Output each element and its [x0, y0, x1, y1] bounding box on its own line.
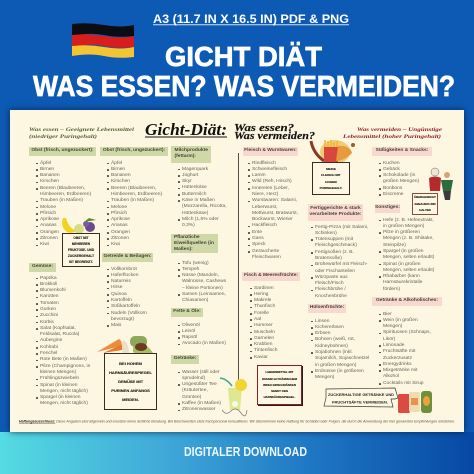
list: Süßigkeiten: Bonbons	[383, 186, 402, 191]
list: Getreide: Nudeln (Vollkorn	[111, 311, 147, 316]
header: Gemüse: Gemüse:	[32, 264, 53, 269]
list: Fette & Öle	[178, 322, 226, 346]
list: Getränke & Alkoholisches	[379, 312, 431, 386]
list: Pflanzliche Eiweißquellen: Tofu (wenig)	[182, 260, 209, 266]
heading: Was vermeiden unsuitable foods: Lebensmittel (hoher Puringehalt)	[342, 133, 441, 140]
icon: two people	[429, 168, 453, 200]
list: Hülsenfrüchte: Mengen)	[315, 375, 334, 380]
list: Getränke good: Grüntee)	[182, 395, 201, 400]
callout: vegetables: HARNSÄURESPIEGEL	[109, 370, 152, 375]
header: Fisch: Fisch & Meeresfrüchte:	[244, 273, 298, 278]
list: Getränke good: Wasser (still oder	[182, 370, 220, 374]
list: Sonstiges: Steinpilze)	[383, 243, 406, 248]
list: Milchprodukte: Milch (1,5% oder	[182, 217, 219, 222]
list: Milchprodukte: 0,3%)	[182, 223, 195, 228]
heading: Was essen? Was vermeiden?: Was essen?	[234, 123, 294, 134]
header: Fleisch: Fleisch & Wurstwaren:	[244, 148, 297, 153]
list: Fertiggerichte: Würzpaste aus	[315, 275, 348, 280]
list: Getränke good: (Kräutertee,	[182, 388, 208, 393]
list: Fleisch: Bockwurst, Wiener	[252, 217, 293, 222]
list: Sonstiges: Mengen (z. B. Shiitake,	[383, 236, 434, 241]
list: Getränke good: Zitronenwasser	[182, 407, 215, 412]
list: Getränke & Alkoholisches: Cocktails mit Sirup	[383, 381, 424, 386]
header: Getreide: Getreide & Beilagen:	[103, 254, 152, 259]
list: Milchprodukte: Skyr	[182, 179, 192, 184]
footer: digital download: DIGITALER DOWNLOAD	[184, 445, 307, 459]
list: Getränke & Alkoholisches: Energydrinks	[383, 362, 412, 367]
list: Gemüse: Blumenkohl	[40, 288, 66, 293]
callout: fruit	[62, 233, 100, 267]
list: Sonstiges: Spinat (in großen	[383, 262, 421, 267]
list: Hülsenfrüchte: Sojabohnen (inkl.	[315, 350, 353, 355]
callout: fruit: IST BEGRENZT.	[69, 260, 93, 264]
list: Obst 2: Bananen	[111, 173, 131, 178]
list: Getreide: Kartoffeln	[111, 298, 132, 303]
list: Fleisch: Rindfleisch	[252, 160, 276, 166]
list: Fleisch: Gans	[252, 236, 264, 241]
list: Süßigkeiten: Eiscreme	[383, 192, 403, 197]
list: Getränke & Alkoholisches: Mengen)	[383, 324, 402, 329]
list: Süßigkeiten: Gebäck	[383, 167, 400, 172]
list: Fertiggerichte: Schinken)	[315, 231, 337, 236]
list: Gemüse: Spinat (in kleinen	[40, 383, 78, 388]
list: Gemüse: Kohlrabi	[40, 345, 58, 350]
list: Fertiggerichte: Fleischbrühe /	[315, 287, 346, 292]
list: Gemüse: Feldsalat, Rucola)	[40, 332, 79, 337]
callout: glycemic index: LEBENSMITTEL MIT	[266, 370, 293, 374]
list: Getränke & Alkoholisches: Spirituosen (Schnaps,	[383, 330, 431, 335]
list: Fleisch: Speck	[252, 242, 266, 247]
list: Obst 1: Beeren (Blaubeeren,	[40, 186, 85, 191]
list: Getränke & Alkoholisches: Limonade	[383, 343, 404, 348]
list: Hülsenfrüchte: Erdnüsse (in größeren	[315, 369, 364, 374]
list: Obst 2: Ananas	[111, 223, 128, 228]
list: Sonstiges	[379, 218, 434, 292]
list: Getreide: Hirse	[111, 285, 122, 290]
list: Obst 1: Trauben (in Maßen)	[40, 198, 83, 203]
heading: Was vermeiden unsuitable foods: Was vermeiden – Ungünstige	[357, 127, 443, 133]
header: Getränke good: Getränke:	[174, 356, 196, 361]
header: Süßigkeiten: Süßigkeiten & Snacks:	[376, 148, 428, 153]
list: Fleisch: Leberwurst,	[252, 205, 278, 210]
callout: fruit: FRUKTOSE- UND	[68, 248, 94, 252]
list: Obst 2: Beeren (Blaubeeren,	[111, 186, 156, 191]
header: Gemüse	[29, 263, 56, 272]
list: Fisch: Hering	[254, 292, 268, 297]
list: Fertiggerichte: Tütensuppen (mit	[315, 237, 353, 242]
list: Obst 1: Birnen	[40, 167, 54, 172]
divider line	[238, 153, 239, 385]
list: Pflanzliche Eiweißquellen: Samen (Leinsamen,	[182, 292, 226, 297]
list: Fisch: Muscheln	[254, 330, 275, 335]
list: Gemüse: Brokkoli	[40, 282, 57, 287]
header: Getränke & Alkoholisches: Getränke & Alkoholisches:	[376, 298, 438, 303]
list: Gemüse: Aubergine	[40, 338, 62, 343]
list: Getreide: Naturreis	[111, 279, 131, 284]
list: Sonstiges: Hefe (z. B. Hefeextrakt,	[383, 218, 434, 222]
icon: lemon drink	[220, 377, 248, 416]
callout: meat	[312, 162, 350, 195]
list: Obst 2: Aprikose	[111, 217, 130, 222]
header: Obst 2	[100, 147, 168, 156]
list: Getränke good: Ungesüßter Tee	[182, 382, 217, 387]
list: Fisch: Garnelen	[254, 336, 274, 341]
list: Getreide: Quinoa	[111, 292, 127, 297]
list: Obst 2: Melone	[111, 205, 127, 210]
callout: weight: HALTEN	[419, 208, 431, 212]
heading: Was essen suitable foods	[29, 127, 135, 140]
list: Obst 1: Zitronen	[40, 236, 58, 241]
list: Getreide: Vollkornbrot	[111, 266, 137, 272]
header: Pflanzliche Eiweißquellen: Pflanzliche	[174, 234, 200, 240]
icon: German flag	[72, 23, 134, 58]
list: Fleisch: Schweinefleisch	[252, 167, 287, 172]
list: Gemüse: kleinen Mengen)	[40, 370, 76, 375]
icon: meat and fries	[310, 140, 355, 162]
list: Süßigkeiten: Schokolade (in	[383, 173, 415, 178]
list: Obst 1: Äpfel	[40, 160, 51, 166]
callout: vegetables: MEIDEN.	[122, 397, 139, 402]
list: Fertiggerichte: oder Fischanteilen	[315, 269, 355, 274]
list: Milchprodukte	[178, 166, 227, 228]
heading: Was vermeiden unsuitable foods	[342, 127, 443, 140]
list: Getränke & Alkoholisches: Fruchtsäfte mit	[383, 349, 415, 354]
header: Pflanzliche Eiweißquellen: Eiweißquellen (in	[174, 241, 214, 246]
list: Fleisch: Hackfleisch	[252, 223, 277, 228]
callout: fruit: OBST MIT	[73, 236, 89, 240]
header: Fette & Öle	[171, 308, 203, 317]
list: Getränke & Alkoholisches: Likör)	[383, 337, 395, 342]
list: Hülsenfrüchte	[311, 318, 369, 380]
list: Fertiggerichte: Brühewürfel mit Fleisch-	[315, 262, 367, 267]
list: Pflanzliche Eiweißquellen: – kleine Portionen)	[182, 286, 223, 291]
list: Fertiggerichte: Fertig-Pizza (mit Salami,	[315, 224, 368, 230]
heading: Was essen? Was vermeiden?	[234, 123, 315, 142]
list: Getränke good: Kaffee (in Maßen)	[182, 401, 221, 406]
list: Obst 1: Aprikose	[40, 217, 59, 222]
list: Obst 2: Kirschen	[111, 179, 130, 184]
list: Gemüse: Salat (Kopfsalat,	[40, 326, 76, 331]
list: Fisch	[250, 286, 278, 360]
list: Fertiggerichte: Fleischgeschmack)	[315, 243, 357, 248]
list: Milchprodukte: (Mozzarella, Ricotta,	[182, 204, 227, 209]
list: Getreide: Mais	[111, 323, 121, 328]
list: Obst 1: Himbeeren, Erdbeeren)	[40, 192, 91, 197]
list: Getränke & Alkoholisches: Mixgetränke mit	[383, 368, 418, 373]
list: Hülsenfrüchte: Kidneybohnen)	[315, 344, 348, 349]
list: Getränke good: sprudelnd)	[182, 376, 205, 381]
list: Obst 1: Pfirsich	[40, 211, 56, 216]
list: Gemüse: Spargel (in kleinen	[40, 395, 81, 400]
list: Gemüse: Rote Bete (in Maßen)	[40, 357, 87, 362]
title: Gicht Diät: GICHT DIÄT	[165, 41, 322, 72]
list: Fette & Öle: Rapsöl	[182, 335, 197, 340]
list: Hülsenfrüchte: Linsen	[315, 318, 329, 324]
list: Getreide: bevorzugt)	[111, 317, 134, 322]
list: Getränke & Alkoholisches: Bier	[383, 312, 392, 316]
list: Fertiggerichte: Knochenbrühe	[315, 294, 347, 299]
icon: vegetables	[97, 336, 153, 353]
header: Getreide	[102, 253, 153, 262]
list: Obst 1	[36, 160, 91, 247]
icon: fruit	[62, 218, 96, 233]
callout: vegetables: PURINEN ANFANGS	[111, 388, 150, 393]
list: Fisch: Sardinen	[254, 286, 274, 290]
list: Sonstiges: in großen Mengen)	[383, 224, 424, 229]
list: Fisch: Hummer	[254, 323, 273, 328]
list: Getränke & Alkoholisches: Alkohol	[383, 374, 399, 379]
header: Fertiggerichte: Fertiggerichte & stark	[310, 206, 361, 211]
list: Obst 1: Melone	[40, 205, 56, 210]
callout: fruit: MEHREREN	[72, 242, 90, 246]
background: bottom gradient band	[0, 432, 474, 474]
list: Fisch: Aal	[254, 317, 261, 322]
list: Obst 2: Pfirsich	[111, 211, 127, 216]
list: Fleisch: Geräucherte	[252, 249, 279, 254]
callout: sugary drinks: ZUCKERHALTIGE GETRÄNKE UND	[328, 392, 394, 397]
callout: weight: ÜBERGEWICHT	[414, 195, 436, 199]
list: Fisch: Thunfisch	[254, 304, 275, 309]
list: Milchprodukte: Hüttenkäse)	[182, 211, 208, 216]
list: Fleisch: Fleischwaren	[252, 255, 281, 260]
header: Milchprodukte	[171, 146, 211, 162]
list: Fette & Öle: Olivenöl	[182, 322, 200, 328]
heading: Was essen suitable foods: Was essen – Geeignete Lebensmittel	[29, 127, 135, 133]
list: Hülsenfrüchte: Sojamilch, Sojaschnetzel	[315, 356, 369, 361]
callout: glycemic index: HOHEM GLYKÄMISCHEM	[262, 377, 297, 381]
list: Gemüse: Kürbis	[40, 320, 54, 325]
callout: vegetables: GEMÜSE MIT	[118, 379, 143, 384]
header: Obst 2: Obst (frisch, ungezuckert):	[103, 148, 165, 153]
list: Fleisch: Wurstwaren: Salami,	[252, 198, 297, 203]
header: Getränke good	[171, 355, 199, 364]
list: Gemüse: Zucchini	[40, 313, 58, 318]
list: Milchprodukte: Magerquark	[182, 166, 208, 172]
header: Sonstiges: Sonstiges:	[375, 205, 400, 210]
list: Obst 2: Kiwi	[111, 242, 120, 247]
disclaimer: Haftungsausschluss: Diese Angaben sind allgemein und ersetzen keine ärztliche Beratung. Bei Beschwerden stets Fachpersonal konsultieren. Wir übernehmen keine Haftung für Schäden oder Folgen, die durch die Anwendung der hier genannten Empfehlungen entstehen.	[19, 420, 455, 424]
list: Gemüse: Frühlingszwiebeln	[40, 376, 79, 381]
callout: sugary drinks: FRUCHTSÄFTE VERMEIDEN.	[332, 400, 388, 404]
list: Fisch: Tintenfisch	[254, 348, 277, 353]
list: Pflanzliche Eiweißquellen: Nüsse (Mandeln,	[182, 273, 219, 278]
list: Gemüse: Karotten	[40, 294, 58, 299]
header: Pflanzliche Eiweißquellen: Maßen):	[174, 247, 193, 252]
header: Obst 1	[29, 147, 96, 156]
heading: Was essen suitable foods: (niedriger Puringehalt)	[29, 133, 97, 140]
callout: fruit: ZUCKERGEHALT	[68, 254, 94, 258]
header: Fertiggerichte	[308, 204, 363, 221]
list: Getränke & Alkoholisches: Wein (in großen	[383, 318, 418, 323]
list: Sonstiges: Pilze in größeren	[383, 230, 420, 235]
list: Milchprodukte: Käse in Maßen	[182, 198, 215, 203]
list: Hülsenfrüchte: Kichererbsen	[315, 325, 344, 330]
list: Fertiggerichte	[311, 224, 368, 299]
list: Hülsenfrüchte: Bohnen (weiß, rot,	[315, 337, 355, 342]
list: Getränke good	[178, 370, 221, 412]
list: Sonstiges: fördern)	[383, 287, 400, 292]
list: Fleisch: Ente	[252, 230, 262, 235]
list: Süßigkeiten: großen Mengen)	[383, 179, 419, 184]
list: Hülsenfrüchte: in großen Mengen)	[315, 363, 356, 368]
list: Fleisch: Niere, Herz)	[252, 192, 278, 197]
list: Fisch: Forelle	[254, 311, 269, 316]
header: Fisch	[242, 272, 300, 280]
list: Süßigkeiten: Kuchen	[383, 160, 400, 166]
list: Süßigkeiten	[379, 160, 419, 197]
list: Pflanzliche Eiweißquellen	[178, 260, 226, 303]
callout: weight: ABBAUEN UND	[414, 202, 436, 206]
list: Obst 2: Orangen	[111, 230, 130, 235]
list: Obst 2: Trauben (in Maßen)	[111, 198, 154, 203]
list: Sonstiges: Rhabarber (kann	[383, 274, 420, 279]
list: Getreide: Haferflocken	[111, 273, 138, 278]
list: Pflanzliche Eiweißquellen: Walnüsse, Cashews	[182, 279, 226, 284]
list: Gemüse	[36, 276, 90, 406]
header: Milchprodukte: (fettarm):	[174, 154, 196, 159]
list: Obst 2: Äpfel	[111, 160, 122, 166]
callout: vegetables	[104, 353, 157, 410]
list: Fertiggerichte: Bratensoße)	[315, 256, 342, 261]
list: Fleisch: Lamm	[252, 173, 266, 178]
list: Sonstiges: Spargel (in großen	[383, 249, 424, 254]
list: Gemüse: Paprika	[40, 276, 57, 280]
heading: Was essen? Was vermeiden?: Was vermeiden?	[234, 131, 315, 142]
list: Sonstiges: Harnsäurekristalle	[383, 280, 422, 285]
list: Fette & Öle: Avocado (in Maßen)	[182, 341, 226, 346]
callout: meat: HOHEM	[325, 180, 337, 184]
header: Pflanzliche Eiweißquellen	[171, 234, 218, 253]
list: Milchprodukte: Joghurt	[182, 173, 198, 178]
header: Hülsenfrüchte: Hülsenfrüchte:	[310, 305, 344, 310]
list: Sonstiges: Mengen, selten erlaubt)	[383, 268, 434, 273]
header: Hülsenfrüchte	[308, 304, 346, 312]
list: Fleisch: Wild (Reh, Hirsch)	[252, 179, 292, 184]
list: Obst 1: Kiwi	[40, 242, 49, 247]
list: Fleisch	[248, 160, 298, 260]
list: Obst 1: Orangen	[40, 230, 59, 235]
header: Sonstiges	[375, 204, 400, 212]
header: Milchprodukte: Milchprodukte	[174, 148, 208, 153]
list: Obst 2	[107, 160, 162, 247]
list: Milchprodukte: Buttermilch	[182, 192, 206, 197]
callout: glycemic index: HARNSÄURESPIEGEL.	[264, 395, 295, 399]
heading: Gicht-Diät: Gicht-Diät:	[145, 120, 227, 139]
format line: A3 (11.7 IN X 16.5 IN) PDF & PNG	[153, 14, 349, 26]
list: Getreide: Süßkartoffeln	[111, 304, 140, 309]
header: Obst 1: Obst (frisch, ungezuckert):	[31, 148, 94, 153]
list: Gemüse: Mengen, nicht täglich)	[40, 389, 88, 394]
header: Fette & Öle: Fette & Öle:	[173, 309, 201, 314]
list: Milchprodukte: Hüttenkäse	[182, 185, 207, 190]
list: Obst 2: Birnen	[111, 167, 125, 172]
list: Fertiggerichte: Fertigsoßen (z. B.	[315, 250, 354, 255]
header: Getränke & Alkoholisches	[372, 297, 442, 306]
list: Fleisch: Mettwurst, Bratwurst,	[252, 211, 298, 216]
list: Gemüse: Gurken	[40, 307, 56, 312]
callout: glycemic index: INDEX EINSCHRÄNKEN	[263, 383, 296, 387]
list: Gemüse: Fenchel	[40, 351, 57, 356]
callout: sugary drinks	[324, 388, 398, 408]
list: Pflanzliche Eiweißquellen: Tempeh	[182, 267, 199, 272]
callout: glycemic index: SENKT DEN	[271, 389, 288, 393]
icon: soda cans	[398, 391, 432, 413]
callout: glycemic index	[257, 365, 302, 405]
header: Fleisch	[243, 147, 298, 156]
callout: weight	[412, 193, 438, 215]
list: Hülsenfrüchte: Erbsen	[315, 331, 330, 336]
list: Obst 2: Zitronen	[111, 236, 129, 241]
list: Gemüse: Tomaten	[40, 301, 59, 306]
list: Fisch: Kaviar	[254, 355, 268, 360]
list: Gemüse: Pilze (Champignons, in	[40, 364, 90, 369]
list: Obst 1: Ananas	[40, 223, 57, 228]
list: Getreide	[107, 266, 147, 328]
list: Fertiggerichte: Fleisch/Fisch	[315, 281, 344, 286]
list: Getränke & Alkoholisches: Zuckerzusatz	[383, 356, 412, 361]
list: Fisch: Makrele	[254, 298, 271, 303]
list: Gemüse: Mengen, nicht täglich)	[40, 401, 88, 406]
list: Pflanzliche Eiweißquellen: Chiasamen)	[182, 298, 208, 303]
list: Obst 1: Kirschen	[40, 179, 59, 184]
list: Sonstiges: Mengen, selten erlaubt)	[383, 255, 434, 260]
callout: vegetables: BEI HOHEM	[119, 361, 142, 366]
list: Obst 2: Himbeeren, Erdbeeren)	[111, 192, 162, 197]
list: Fisch: Krabben	[254, 342, 272, 347]
list: Fleisch: Innereien (Leber,	[252, 186, 289, 191]
list: Obst 1: Bananen	[40, 173, 60, 178]
callout: meat: MEIDE	[326, 167, 336, 171]
callout: meat: PURINGEHALT.	[320, 186, 342, 190]
header: Fertiggerichte: verarbeitete Produkte:	[310, 212, 361, 217]
panel: poster	[10, 110, 464, 432]
header: Süßigkeiten	[372, 147, 432, 156]
list: Fette & Öle: Leinöl	[182, 329, 195, 334]
callout: meat: FLEISCH MIT	[321, 173, 341, 177]
